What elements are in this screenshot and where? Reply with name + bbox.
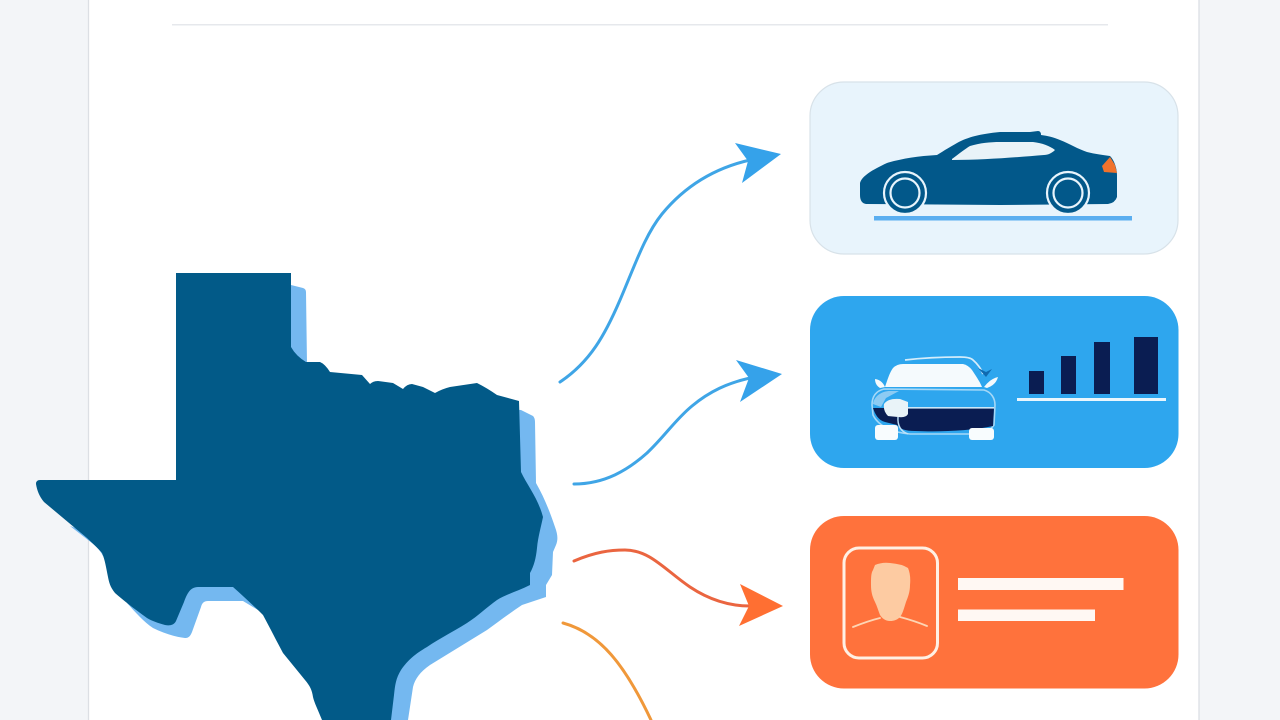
card: driver license [810, 516, 1178, 688]
card: car with rising bars [810, 296, 1178, 468]
arrow: orange heading downward [563, 623, 651, 720]
map body [36, 273, 543, 720]
icon: front wheel [884, 172, 926, 214]
arrow: blue to charging card [574, 360, 782, 484]
text lines placeholder [958, 578, 1124, 621]
card: side view car [810, 82, 1178, 254]
icon: car silhouette [860, 131, 1132, 220]
map shadow [127, 285, 557, 720]
arrow: blue to vehicle card [560, 143, 781, 382]
map shadow: western sliver [70, 526, 110, 556]
icon: portrait frame [844, 548, 938, 658]
arrow: orange-red to license card [574, 550, 783, 626]
icon: rear wheel [1047, 172, 1089, 214]
bar chart: rising bars [1017, 337, 1166, 401]
icon: front view car [872, 357, 998, 440]
map: Texas silhouette with shadow [36, 273, 557, 720]
